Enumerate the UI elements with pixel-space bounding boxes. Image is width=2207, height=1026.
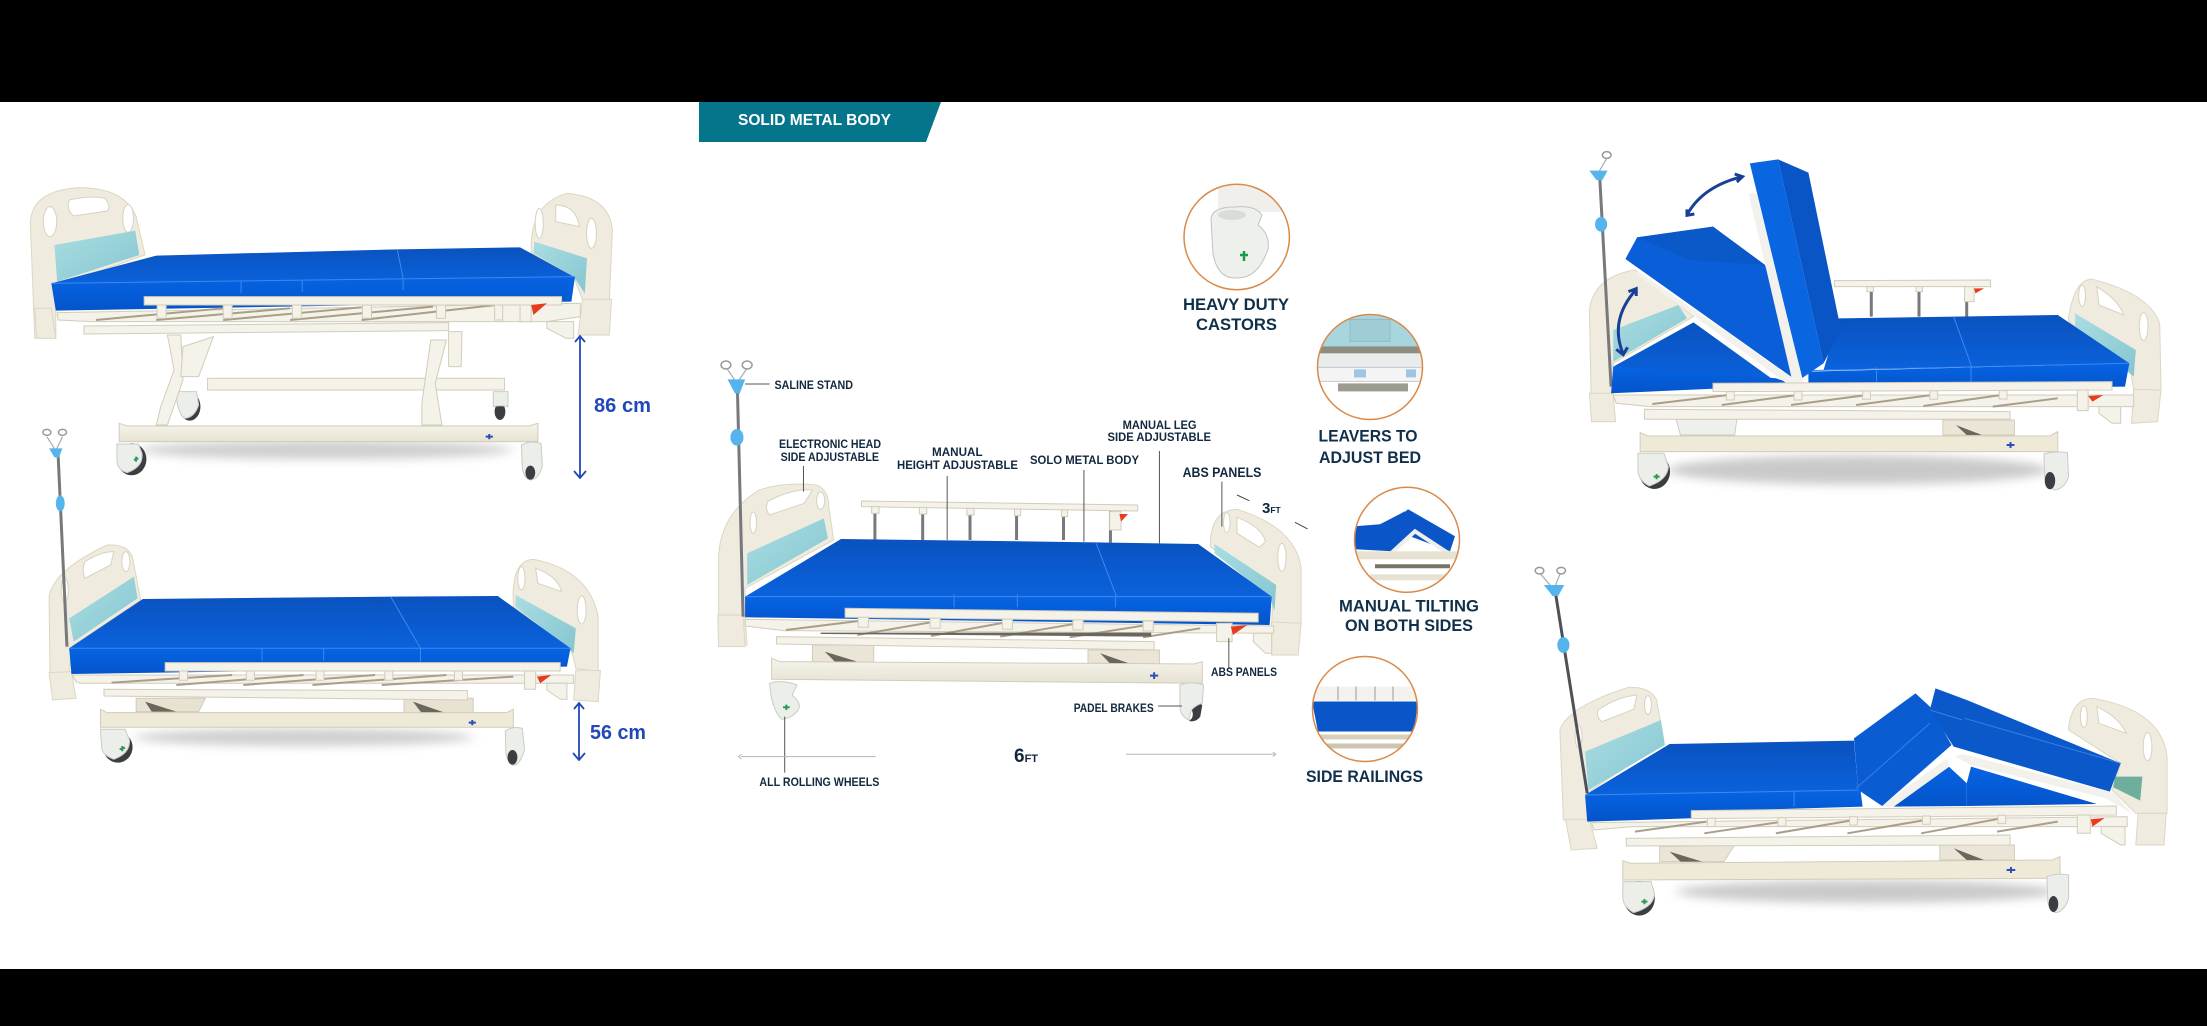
bottom black band — [0, 969, 2207, 1026]
label: electronic head side adjustable: ELECTRONIC HEAD — [779, 437, 881, 451]
label: abs panels lower: ABS PANELS — [1211, 665, 1277, 679]
bed: raised position 86 cm — [30, 188, 612, 480]
bed: lowered position 56 cm — [43, 429, 600, 765]
label: manual leg side adjustable: MANUAL LEG — [1123, 418, 1197, 432]
label: saline stand: SALINE STAND — [774, 378, 853, 392]
label: electronic head side adjustable: SIDE ADJUSTABLE — [781, 450, 879, 464]
label: electronic head side adjustable — [779, 437, 881, 464]
callout: manual tilting on both sides: ON BOTH SIDES — [1345, 616, 1473, 635]
callout: leavers to adjust bed — [1318, 314, 1422, 467]
label: manual height adjustable: HEIGHT ADJUSTABLE — [897, 458, 1018, 472]
bed: head section tilted — [1589, 152, 2161, 490]
arrow: 56 cm height: 56 cm — [590, 722, 646, 744]
dimension: 3 ft: 3FT — [1262, 500, 1282, 517]
callout: side railings: SIDE RAILINGS — [1306, 767, 1423, 786]
callout: leavers to adjust bed: ADJUST BED — [1319, 448, 1421, 467]
callout: side railings — [1306, 656, 1423, 786]
banner: solid metal body — [699, 102, 941, 142]
banner: solid metal body: SOLID METAL BODY — [738, 112, 892, 129]
dimension: 6 ft: 6FT — [1014, 746, 1038, 767]
callout: leavers to adjust bed: LEAVERS TO — [1318, 427, 1418, 446]
label: manual height adjustable — [897, 445, 1018, 472]
label: manual leg side adjustable — [1108, 418, 1211, 444]
leader lines and dimension marks — [739, 384, 1308, 773]
label: all rolling wheels: ALL ROLLING WHEELS — [759, 775, 879, 789]
label: abs panels top: ABS PANELS — [1183, 465, 1261, 480]
top black band — [0, 0, 2207, 102]
label: solo metal body: SOLO METAL BODY — [1030, 453, 1139, 467]
label: manual height adjustable: MANUAL — [932, 445, 983, 459]
arrow: 86 cm height: 86 cm — [594, 395, 651, 417]
label: padel brakes: PADEL BRAKES — [1074, 701, 1154, 715]
callout: heavy duty castors: CASTORS — [1196, 315, 1277, 334]
callout: heavy duty castors: HEAVY DUTY — [1183, 295, 1290, 314]
arrow: 86 cm height — [574, 336, 651, 478]
callout: manual tilting on both sides: MANUAL TILTING — [1339, 596, 1479, 616]
callout: manual tilting on both sides — [1339, 487, 1479, 635]
bed: central annotated bed — [718, 361, 1301, 721]
arrow: 56 cm height — [573, 703, 646, 760]
callout: heavy duty castors — [1183, 179, 1290, 334]
label: manual leg side adjustable: SIDE ADJUSTABLE — [1108, 430, 1211, 444]
bed: mid section tilted — [1535, 567, 2167, 916]
